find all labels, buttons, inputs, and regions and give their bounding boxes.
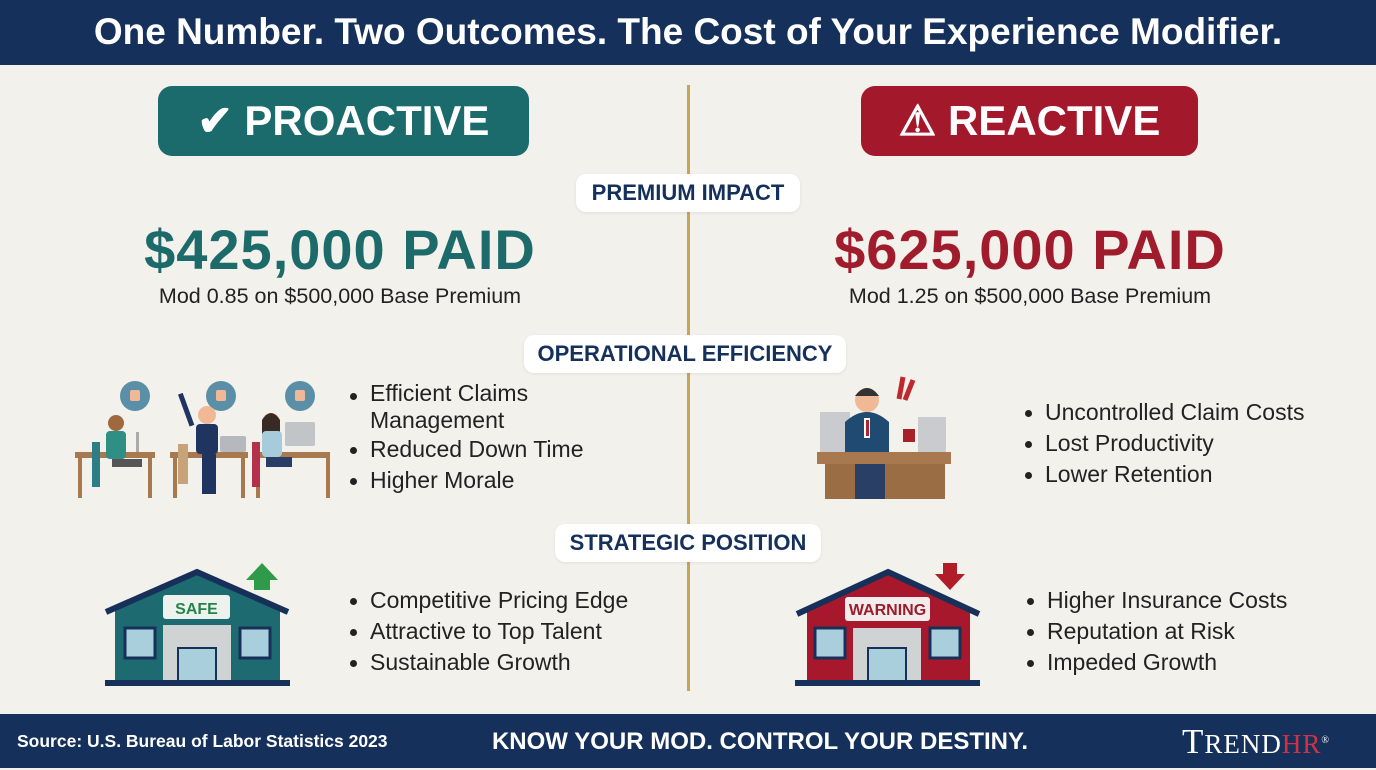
- badge: proactive: ✔ PROACTIVE: [198, 97, 489, 144]
- label: strategic position: STRATEGIC POSITION: [570, 530, 806, 555]
- person 3: [262, 413, 280, 431]
- reactive efficiency bullets: Lower Retention: [1045, 461, 1212, 487]
- proactive strategic bullets: Sustainable Growth: [370, 649, 571, 675]
- icon: warning house: [795, 563, 980, 686]
- header bar: One Number. Two Outcomes. The Cost of Your Experience Modifier.: [94, 11, 1282, 52]
- logo: TRENDHR®: [1182, 722, 1330, 761]
- label: operational efficiency: OPERATIONAL EFFICIENCY: [538, 341, 832, 366]
- reactive efficiency bullets: Lost Productivity: [1045, 430, 1214, 456]
- divider: [687, 85, 690, 691]
- proactive efficiency bullets: [350, 380, 584, 493]
- label: strategic position: [555, 524, 821, 562]
- label: premium impact: PREMIUM IMPACT: [592, 180, 784, 205]
- icon: stressed worker: [817, 376, 951, 499]
- proactive premium: $425,000 PAID: [144, 218, 536, 281]
- badge: reactive: ⚠ REACTIVE: [899, 97, 1160, 144]
- badge: reactive: [861, 86, 1198, 156]
- proactive efficiency bullets: Management: [370, 407, 504, 433]
- reactive strategic bullets: [1027, 587, 1287, 675]
- proactive strategic bullets: Competitive Pricing Edge: [370, 587, 628, 613]
- header bar: [0, 0, 1376, 65]
- footer bar: [0, 714, 1376, 768]
- reactive premium: $625,000 PAID: [834, 218, 1226, 281]
- icon: safe house: SAFE: [175, 601, 218, 618]
- proactive efficiency bullets: Higher Morale: [370, 467, 514, 493]
- badge: proactive: [158, 86, 529, 156]
- reactive strategic bullets: Reputation at Risk: [1047, 618, 1235, 644]
- label: premium impact: [576, 174, 800, 212]
- reactive premium: Mod 1.25 on $500,000 Base Premium: [849, 284, 1211, 308]
- icon: warning house: WARNING: [849, 602, 926, 619]
- icon: safe house: [104, 563, 290, 686]
- reactive strategic bullets: Impeded Growth: [1047, 649, 1217, 675]
- reactive efficiency bullets: [1025, 399, 1304, 487]
- proactive efficiency bullets: Reduced Down Time: [370, 436, 584, 462]
- proactive premium: Mod 0.85 on $500,000 Base Premium: [159, 284, 521, 308]
- label: operational efficiency: [524, 335, 846, 373]
- reactive strategic bullets: Higher Insurance Costs: [1047, 587, 1287, 613]
- proactive strategic bullets: Attractive to Top Talent: [370, 618, 602, 644]
- reactive efficiency bullets: Uncontrolled Claim Costs: [1045, 399, 1304, 425]
- source: Source: U.S. Bureau of Labor Statistics 2023: [17, 731, 388, 751]
- icon: happy workers: [75, 381, 330, 498]
- person 1: [108, 415, 124, 431]
- person 2: [198, 406, 216, 424]
- proactive efficiency bullets: Efficient Claims: [370, 380, 528, 406]
- tagline: KNOW YOUR MOD. CONTROL YOUR DESTINY.: [492, 728, 1028, 755]
- proactive strategic bullets: [350, 587, 628, 675]
